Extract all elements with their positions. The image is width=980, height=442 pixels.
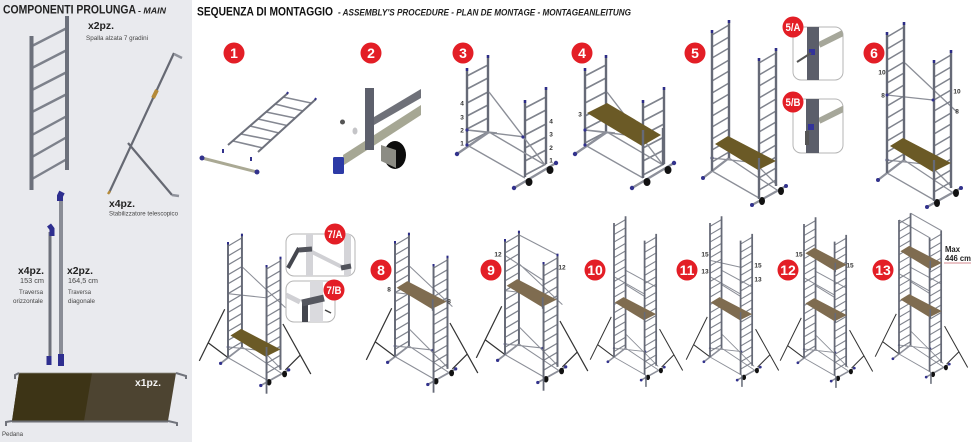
badge 7/A: 7/A bbox=[328, 229, 343, 241]
label: horizontal brace: 153 cm bbox=[20, 278, 44, 285]
assembly numbers: 1 bbox=[549, 158, 553, 164]
badge 13: 13 bbox=[875, 262, 891, 278]
assembly numbers: 3 bbox=[549, 132, 553, 138]
badge 10: 10 bbox=[587, 262, 603, 278]
badge 7/B: 7/B bbox=[326, 285, 342, 297]
assembly numbers: 10 bbox=[953, 88, 961, 96]
step 13 bbox=[872, 213, 971, 384]
maximum height label: Max bbox=[945, 245, 961, 254]
label: ladder frame quantity: Spalla alzata 7 gradini bbox=[86, 36, 148, 42]
badge 6 bbox=[864, 42, 884, 64]
assembly numbers: 10 bbox=[878, 70, 886, 76]
assembly numbers bbox=[460, 100, 553, 164]
badge 3: 3 bbox=[459, 45, 467, 61]
tower with platform bbox=[573, 55, 676, 190]
label: stabilizer quantity: Stabilizzatore telescopico bbox=[109, 212, 179, 218]
label: stabilizer quantity: x4pz. bbox=[109, 198, 135, 210]
assembly numbers: 13 bbox=[754, 276, 762, 284]
label: horizontal brace: x4pz. bbox=[18, 265, 44, 277]
component: horizontal and diagonal braces bbox=[49, 192, 62, 366]
tower with two platforms bbox=[780, 217, 873, 388]
tower with stabilizers bbox=[199, 234, 311, 394]
tower bbox=[455, 55, 558, 190]
wheel detail bbox=[333, 88, 421, 174]
badge 12 bbox=[778, 260, 798, 280]
component: platform: x1pz. bbox=[135, 377, 161, 389]
badge 8: 8 bbox=[377, 262, 385, 278]
step 9 bbox=[476, 231, 588, 391]
assembly numbers: 2 bbox=[460, 128, 464, 134]
inset 5/A bbox=[782, 16, 845, 80]
badge 1: 1 bbox=[230, 45, 238, 61]
maximum height label: 446 cm bbox=[945, 254, 971, 263]
inset 5/B bbox=[782, 92, 845, 153]
tower bbox=[701, 20, 788, 207]
badge 5/A: 5/A bbox=[786, 22, 801, 34]
label: platform name: Pedana bbox=[2, 432, 24, 438]
component: telescopic stabilizer bbox=[108, 53, 182, 196]
assembly numbers: 8 bbox=[447, 298, 451, 306]
badge 4 bbox=[572, 42, 592, 64]
tower bbox=[590, 216, 683, 387]
label: horizontal brace: Traversa bbox=[19, 290, 44, 296]
step 2 bbox=[333, 42, 421, 174]
assembly numbers bbox=[494, 252, 566, 272]
assembly numbers: 8 bbox=[955, 108, 959, 116]
label: ladder frame quantity bbox=[86, 20, 148, 42]
inset 7/A bbox=[286, 224, 355, 276]
badge 10 bbox=[584, 260, 606, 280]
step 5 bbox=[684, 20, 788, 207]
label: horizontal brace bbox=[13, 265, 44, 305]
assembly numbers bbox=[387, 286, 451, 306]
tower bbox=[686, 216, 779, 387]
label: diagonal brace: x2pz. bbox=[67, 265, 93, 277]
label: horizontal brace: orizzontale bbox=[13, 299, 44, 305]
label: stabilizer quantity bbox=[109, 198, 179, 218]
step 12 bbox=[778, 217, 873, 388]
tower at maximum height bbox=[875, 213, 968, 384]
heading: componenti prolunga: COMPONENTI PROLUNGA bbox=[3, 4, 136, 16]
assembly numbers: 1 bbox=[460, 140, 464, 148]
badge 13 bbox=[872, 260, 894, 280]
component: ladder frame bbox=[32, 16, 67, 190]
assembly number: 3 bbox=[578, 112, 582, 118]
assembly numbers: 15 bbox=[701, 252, 709, 258]
badge 9: 9 bbox=[487, 262, 495, 278]
heading: assembly sequence: - ASSEMBLY'S PROCEDURE - PLAN DE MONTAGE - MONTAGEANLEITUNG bbox=[338, 8, 632, 18]
assembly numbers bbox=[878, 70, 961, 116]
heading: assembly sequence bbox=[197, 6, 632, 18]
assembly numbers: 3 bbox=[460, 114, 464, 122]
heading: assembly sequence: SEQUENZA DI MONTAGGIO bbox=[197, 6, 333, 18]
step 3 bbox=[452, 42, 558, 190]
label: diagonal brace bbox=[67, 265, 98, 305]
tower bbox=[876, 22, 963, 209]
badge 5: 5 bbox=[691, 45, 699, 61]
badge 3 bbox=[452, 42, 474, 64]
step 10 bbox=[584, 216, 683, 387]
assembly numbers: 2 bbox=[549, 145, 553, 152]
assembly numbers: 13 bbox=[701, 268, 709, 276]
step 8 bbox=[366, 233, 478, 393]
inset 7/B bbox=[286, 280, 344, 322]
step 1 bbox=[200, 42, 316, 174]
badge 11: 11 bbox=[680, 262, 695, 278]
ladder and base bar bbox=[200, 92, 316, 174]
tower bbox=[476, 231, 588, 391]
assembly numbers: 12 bbox=[558, 264, 566, 272]
assembly numbers bbox=[795, 252, 854, 270]
label: diagonal brace: diagonale bbox=[68, 299, 96, 305]
badge 5 bbox=[684, 42, 706, 64]
step 4 bbox=[572, 42, 676, 190]
badge 11 bbox=[676, 260, 698, 280]
label: diagonal brace: 164,5 cm bbox=[68, 278, 98, 285]
heading: componenti prolunga: - MAIN bbox=[138, 6, 167, 16]
assembly numbers: 15 bbox=[846, 262, 854, 270]
label: ladder frame quantity: x2pz. bbox=[88, 20, 114, 32]
panel: components background bbox=[0, 0, 192, 442]
component: platform bbox=[6, 373, 186, 426]
assembly numbers: 8 bbox=[881, 92, 885, 100]
step 11 bbox=[676, 216, 779, 387]
assembly numbers: 15 bbox=[795, 252, 803, 258]
badge 2: 2 bbox=[367, 45, 375, 61]
badge 5/B: 5/B bbox=[786, 97, 801, 109]
assembly numbers: 15 bbox=[754, 262, 762, 270]
tower with raised platform bbox=[366, 233, 478, 393]
badge 4: 4 bbox=[578, 45, 586, 61]
badge 6: 6 bbox=[870, 45, 878, 61]
assembly numbers: 4 bbox=[549, 118, 553, 126]
badge 8 bbox=[370, 260, 392, 280]
maximum height label bbox=[944, 245, 971, 263]
assembly numbers: 4 bbox=[460, 100, 464, 108]
badge 9 bbox=[480, 260, 502, 280]
step 7 bbox=[199, 234, 311, 394]
badge 12: 12 bbox=[780, 262, 796, 278]
label: diagonal brace: Traversa bbox=[68, 290, 92, 296]
step 6 bbox=[864, 22, 963, 209]
assembly numbers bbox=[701, 252, 762, 284]
assembly numbers: 12 bbox=[494, 252, 502, 258]
assembly numbers: 8 bbox=[387, 286, 391, 294]
